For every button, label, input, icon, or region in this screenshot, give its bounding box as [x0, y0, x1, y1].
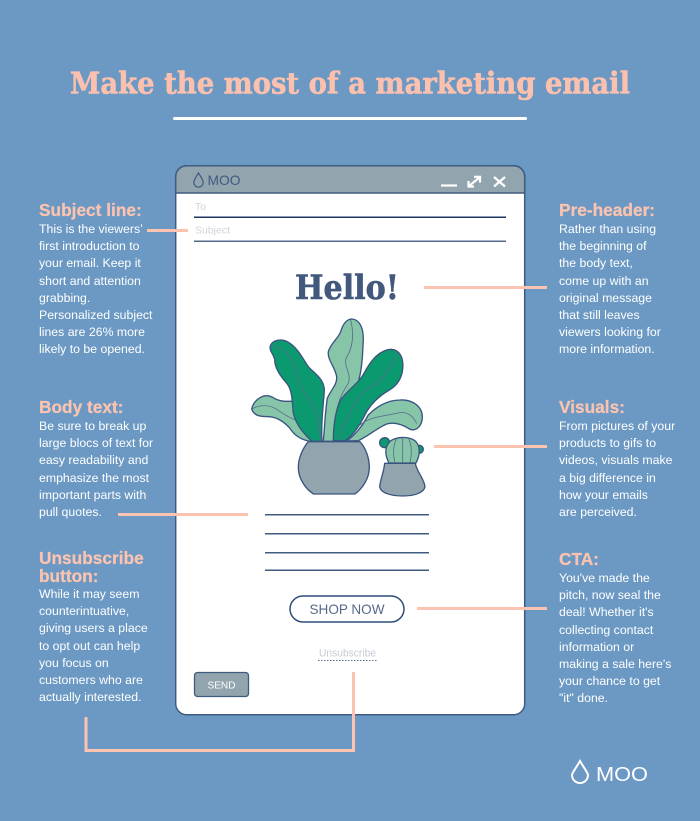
- subject field: Subject: [195, 224, 230, 236]
- connector: CTA: [417, 607, 547, 610]
- text block: pre-header: the beginning of: [559, 239, 647, 253]
- hello heading: Hello!: [295, 268, 399, 308]
- large pot: [298, 442, 369, 494]
- text block: visuals: are perceived.: [559, 505, 637, 519]
- text block: pre-header: more information.: [559, 342, 655, 356]
- text block: body text: Body text:: [39, 397, 124, 417]
- send button: [194, 672, 248, 696]
- text block: pre-header: Rather than using: [559, 222, 656, 236]
- text block: unsubscribe button: you focus on: [39, 656, 109, 670]
- text block: subject line: likely to be opened.: [39, 342, 145, 356]
- text block: subject line: Subject line:: [39, 200, 142, 220]
- text block: visuals: From pictures of your: [559, 419, 675, 433]
- text block: CTA: [559, 549, 671, 705]
- send button: SEND: [208, 680, 236, 692]
- text block: CTA: deal! Whether it's: [559, 605, 654, 619]
- icon: MOO logo footer: MOO: [596, 764, 648, 786]
- body text placeholder lines: [265, 514, 429, 571]
- illustration: potted plants: [252, 319, 425, 496]
- text block: unsubscribe button: [39, 548, 148, 704]
- connector: visuals: [434, 445, 547, 448]
- connector: pre-header: [424, 286, 547, 289]
- text block: CTA: You've made the: [559, 571, 650, 585]
- connector: body text: [118, 513, 248, 516]
- icon: MOO logo footer: [572, 761, 648, 786]
- text block: unsubscribe button: Unsubscribe: [39, 548, 144, 568]
- right dark leaf: [333, 349, 403, 441]
- text block: body text: easy readability and: [39, 453, 149, 467]
- text block: CTA: making a sale here's: [559, 657, 671, 671]
- connector: unsubscribe: [86, 672, 354, 750]
- text block: CTA: collecting contact: [559, 623, 654, 637]
- text block: pre-header: [559, 200, 661, 356]
- text block: subject line: your email. Keep it: [39, 256, 141, 270]
- text block: subject line: first introduction to: [39, 239, 140, 253]
- text block: visuals: how your emails: [559, 488, 648, 502]
- to field: To: [195, 201, 206, 213]
- text block: subject line: short and attention: [39, 274, 141, 288]
- small pot: [380, 463, 425, 496]
- text block: CTA: information or: [559, 640, 634, 654]
- text block: pre-header: viewers looking for: [559, 325, 661, 339]
- text block: CTA: pitch, now seal the: [559, 588, 661, 602]
- text block: pre-header: come up with an: [559, 274, 649, 288]
- text block: visuals: Visuals:: [559, 397, 625, 417]
- text block: pre-header: original message: [559, 291, 652, 305]
- icon: MOO logo in header: MOO: [208, 172, 241, 188]
- title underline: [173, 117, 527, 120]
- text block: pre-header: that still leaves: [559, 308, 640, 322]
- shop now button: SHOP NOW: [310, 601, 385, 617]
- text block: pre-header: the body text,: [559, 256, 633, 270]
- panel: email window: [176, 166, 525, 715]
- text block: CTA: your chance to get: [559, 674, 661, 688]
- text block: body text: [39, 397, 153, 519]
- text block: unsubscribe button: to opt out can help: [39, 639, 140, 653]
- text block: subject line: Personalized subject: [39, 308, 153, 322]
- text block: CTA: "it" done.: [559, 691, 608, 705]
- shop now button: [290, 596, 404, 622]
- text block: body text: large blocs of text for: [39, 436, 153, 450]
- text block: body text: pull quotes.: [39, 505, 102, 519]
- text block: subject line: lines are 26% more: [39, 325, 145, 339]
- text block: subject line: [39, 200, 153, 356]
- text block: unsubscribe button: button:: [39, 566, 98, 586]
- left light leaf: [252, 396, 313, 442]
- cactus: [386, 437, 419, 463]
- text block: visuals: [559, 397, 675, 519]
- text block: unsubscribe button: While it may seem: [39, 587, 139, 601]
- text block: body text: emphasize the most: [39, 471, 150, 485]
- icon: window controls: [441, 177, 505, 186]
- cactus ears: [380, 438, 390, 448]
- text block: subject line: This is the viewers’: [39, 222, 143, 236]
- text block: unsubscribe button: counterintuative,: [39, 604, 129, 618]
- text block: visuals: products to gifs to: [559, 436, 656, 450]
- left dark leaf: [270, 340, 324, 441]
- text block: subject line: grabbing.: [39, 291, 90, 305]
- text block: CTA: CTA:: [559, 549, 599, 569]
- text block: body text: important parts with: [39, 488, 146, 502]
- center light leaf: [323, 319, 363, 441]
- connector: subject line: [147, 229, 188, 232]
- unsubscribe link: Unsubscribe: [319, 648, 376, 660]
- text block: body text: Be sure to break up: [39, 419, 146, 433]
- text block: visuals: videos, visuals make: [559, 453, 673, 467]
- text block: unsubscribe button: customers who are: [39, 673, 143, 687]
- right light leaf: [347, 400, 422, 441]
- text block: unsubscribe button: giving users a place: [39, 621, 148, 635]
- text block: unsubscribe button: actually interested.: [39, 690, 142, 704]
- text block: visuals: a big difference in: [559, 471, 656, 485]
- title: Make the most of a marketing email: [70, 66, 630, 102]
- text block: pre-header: Pre-header:: [559, 200, 655, 220]
